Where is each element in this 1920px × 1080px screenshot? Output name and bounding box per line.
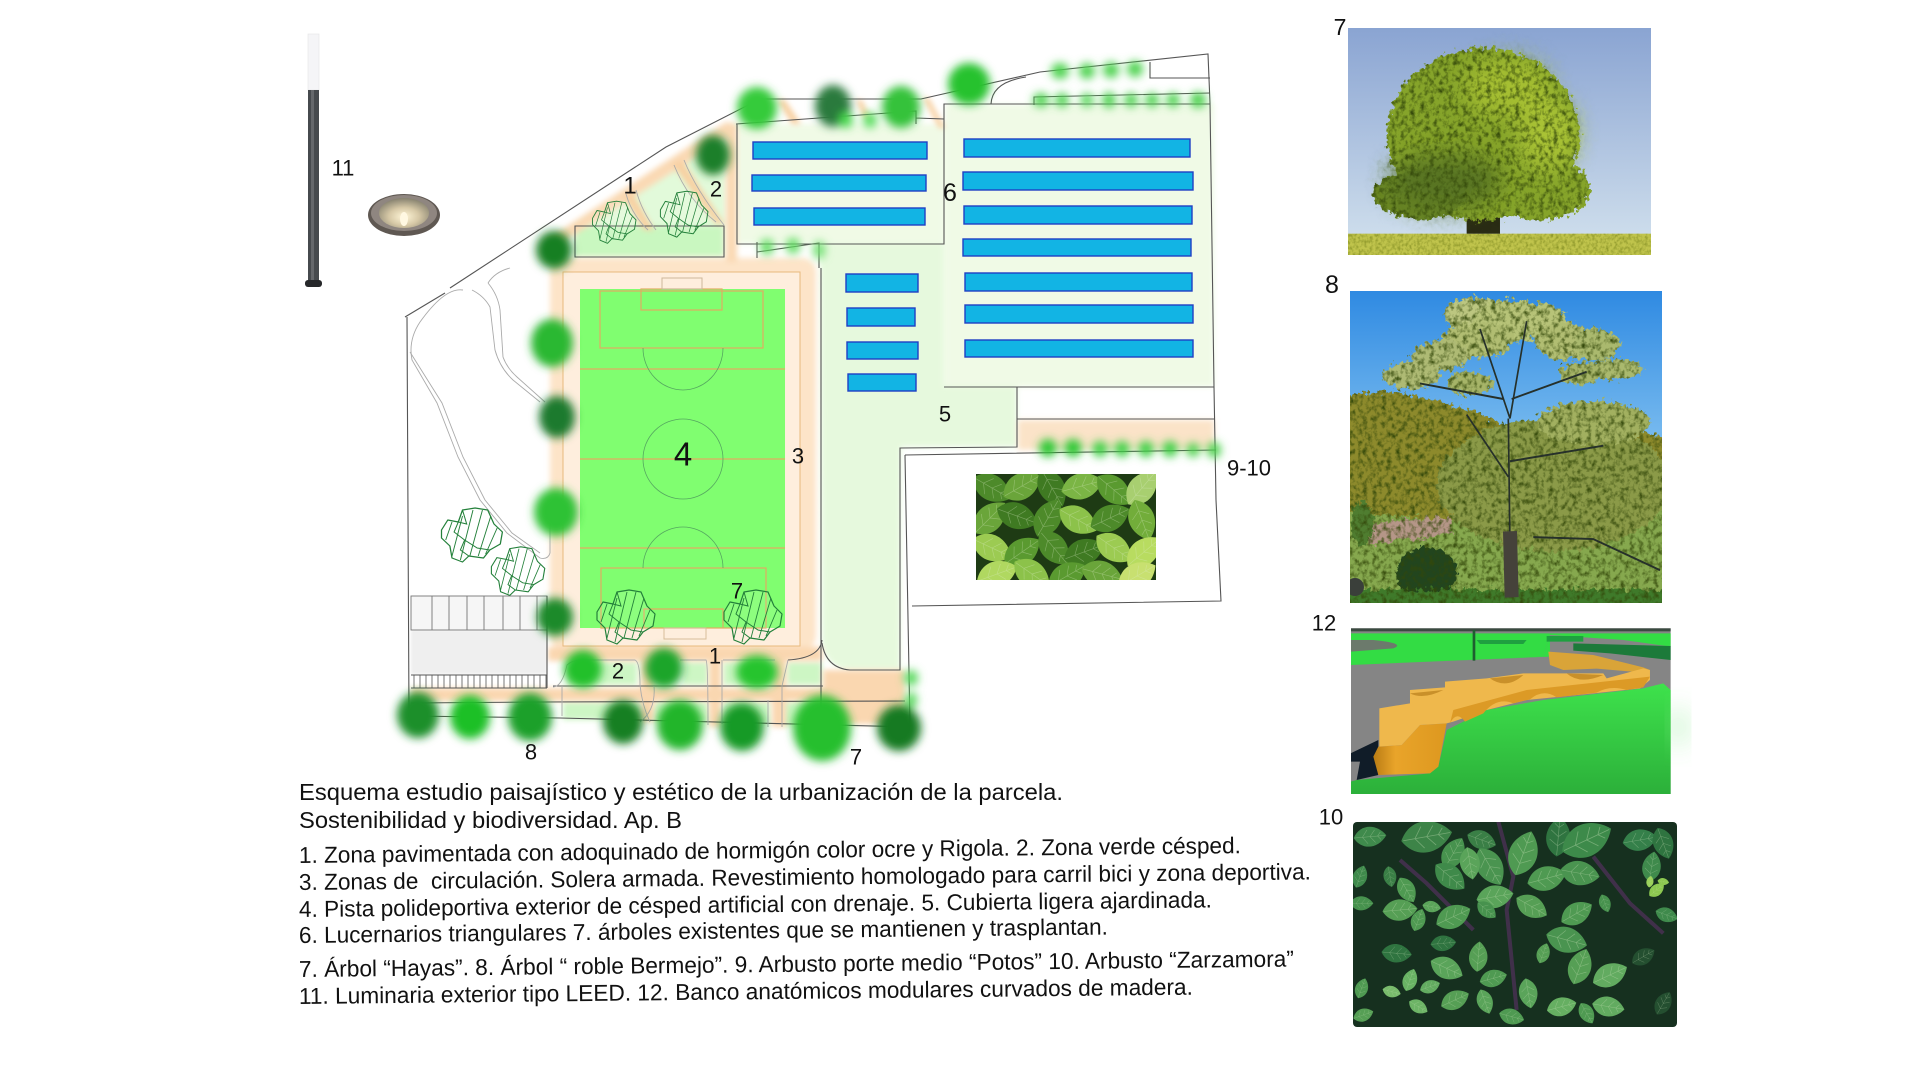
site plan: [332, 54, 1271, 770]
label 12: 12: [1312, 610, 1336, 636]
legend text: 1. Zona pavimentada con adoquinado de hormigón color ocre y Rigola. 2. Zona verde césped.: [299, 832, 1241, 868]
plan number labels: 4: [674, 436, 692, 472]
existing trees, hatched: [442, 191, 782, 644]
plan number labels: 11: [332, 156, 354, 180]
skylights, left group: [752, 142, 927, 225]
plan number labels: 6: [943, 179, 957, 207]
plan number labels: 2: [612, 658, 624, 684]
caption heading: [299, 779, 1063, 833]
plan number labels: 7: [850, 744, 862, 770]
legend text: 4. Pista polideportiva exterior de césped artificial con drenaje. 5. Cubierta ligera ajardinada.: [299, 886, 1212, 922]
legend text: [299, 832, 1311, 1009]
caption heading: Esquema estudio paisajístico y estético de la urbanización de la parcela.: [299, 779, 1063, 805]
plan number labels: 1: [709, 644, 721, 668]
plan number labels: 7: [731, 578, 743, 604]
plan number labels: 5: [939, 402, 951, 426]
plan number labels: 2: [710, 176, 722, 202]
photo 7: beech tree: [1340, 28, 1660, 261]
plan number labels: [332, 156, 1271, 770]
site outlines: [405, 54, 1221, 727]
skylights, right group: [963, 139, 1193, 357]
zone: circulation band: [563, 272, 800, 646]
plan number labels: 1: [623, 172, 637, 200]
label 10: 10: [1319, 804, 1343, 830]
label 7: 7: [1334, 14, 1346, 40]
planted trees and shrubs: [397, 61, 1221, 761]
photo: potos shrub: [976, 474, 1156, 580]
parking block: [411, 596, 547, 688]
legend text: 7. Árbol “Hayas”. 8. Árbol “ roble Bermejo”. 9. Arbusto porte medio “Potos” 10. Arbusto “Zarzamora”: [299, 946, 1294, 982]
photo 12: curved modular bench: [1351, 628, 1684, 794]
legend text: 11. Luminaria exterior tipo LEED. 12. Banco anatómicos modulares curvados de madera.: [299, 974, 1193, 1009]
plan number labels: 8: [525, 740, 537, 764]
photo 8: oak tree: [1350, 291, 1662, 603]
label 8: 8: [1325, 271, 1339, 299]
legend text: 6. Lucernarios triangulares 7. árboles existentes que se mantienen y trasplantan.: [299, 914, 1108, 948]
plan number labels: 9-10: [1227, 456, 1271, 480]
sports pitch: [580, 278, 785, 639]
caption heading: Sostenibilidad y biodiversidad. Ap. B: [299, 807, 682, 833]
zone: paved ochre paths: [411, 98, 1214, 727]
legend text: 3. Zonas de circulación. Solera armada. Revestimiento homologado para carril bici y zona deportiva.: [299, 858, 1311, 895]
icon: recessed ground light: [368, 194, 440, 236]
skylights, centre group: [846, 274, 918, 391]
zone: light garden roof, pale green: [563, 104, 1214, 726]
icon: bollard luminaire: [305, 34, 322, 287]
photo 10: bramble shrub: [1349, 814, 1680, 1027]
plan number labels: 3: [792, 444, 804, 468]
